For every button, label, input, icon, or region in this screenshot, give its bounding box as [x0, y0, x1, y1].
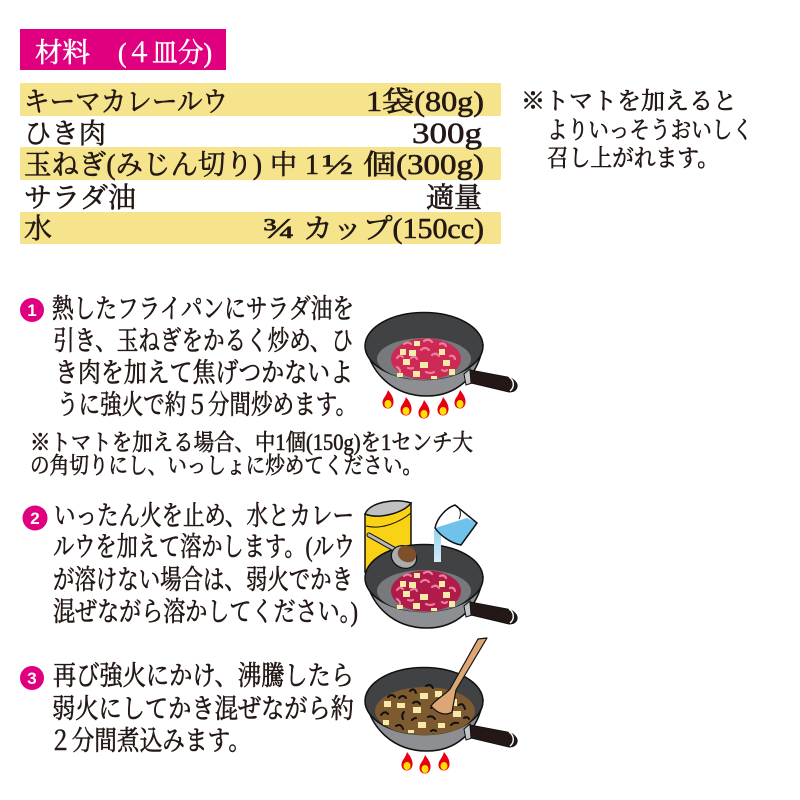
tomato note — [521, 88, 753, 172]
ingredients table: ひき肉 — [24, 118, 106, 150]
ingredients table: カップ(150cc) — [303, 214, 484, 245]
step 3 text: 弱火にしてかき混ぜながら約 — [52, 694, 354, 724]
step 1 note: ※トマトを加える場合、中1個(150g)を1センチ大 — [30, 430, 473, 455]
ingredients table: 水 — [24, 213, 52, 245]
step 3 number badge — [20, 666, 44, 690]
step 1 text: 引き、玉ねぎをかるく炒め、ひ — [53, 326, 353, 356]
ingredients table: 中 — [270, 150, 297, 180]
ingredients table: ¾ — [263, 213, 295, 245]
ingredients table: キーマカレールウ — [24, 87, 228, 118]
ingredients table: 300g — [412, 117, 482, 150]
step 1 text: き肉を加えて焦げつかないよ — [55, 358, 353, 388]
step 3 text: ２分間煮込みます。 — [49, 726, 251, 756]
step 2 number badge — [22, 506, 48, 530]
step 2 number badge: 2 — [30, 509, 40, 528]
step 1 text — [52, 294, 357, 420]
curry mixture — [375, 685, 475, 735]
ingredients table — [20, 83, 501, 245]
ingredients table: 玉ねぎ(みじん切り) — [24, 149, 262, 181]
step 3 text — [49, 661, 354, 756]
step 3 number badge: 3 — [27, 669, 37, 688]
step 2 text: いったん火を止め、水とカレー — [54, 501, 354, 531]
tomato note: ※トマトを加えると — [521, 88, 737, 115]
step 3 text: 再び強火にかけ、沸騰したら — [53, 661, 354, 691]
step 2 text: 混ぜながら溶かしてください。) — [53, 597, 358, 627]
pan with meat — [365, 544, 517, 628]
heading: ingredients — [20, 29, 226, 70]
step 2 text: が溶けない場合は、弱火でかき — [53, 565, 353, 595]
tomato note: 召し上がれます。 — [547, 145, 719, 172]
icon: curry roux box, spoon and water poured into pan — [365, 501, 517, 628]
heading: ingredients: 材料 — [35, 38, 90, 68]
icon: frying pan with curry and wooden spatula over flames — [365, 638, 517, 774]
step 1 text: 熱したフライパンにサラダ油を — [52, 294, 354, 324]
step 1 note — [30, 430, 473, 478]
ingredients table: 適量 — [426, 182, 482, 214]
heading: ingredients: (４皿分) — [118, 38, 212, 68]
step 2 text — [53, 501, 358, 627]
ingredients table: 1袋(80g) — [366, 86, 484, 118]
step 1 number badge: 1 — [27, 301, 37, 320]
step 1 number badge — [20, 298, 44, 322]
ingredients table: 個(300g) — [363, 149, 484, 181]
icon: flames — [382, 390, 466, 418]
icon: wooden spatula — [431, 638, 487, 714]
water stream — [434, 527, 441, 562]
step 1 note: の角切りにし、いっしょに炒めてください。 — [30, 453, 422, 478]
step 2 text: ルウを加えて溶かします。(ルウ — [53, 532, 355, 562]
tomato note: よりいっそうおいしく — [547, 118, 753, 144]
icon: measuring cup — [435, 505, 477, 545]
icon: frying pan with raw meat over flames — [365, 312, 517, 418]
icon: flames — [402, 752, 450, 774]
icon: spoon with roux — [369, 535, 420, 572]
ingredients table: ½ — [322, 149, 353, 181]
ingredients table: 1 — [305, 150, 319, 181]
step 1 text: うに強火で約５分間炒めます。 — [57, 390, 357, 420]
ingredients table: サラダ油 — [24, 182, 136, 214]
icon: roux box — [365, 501, 411, 572]
